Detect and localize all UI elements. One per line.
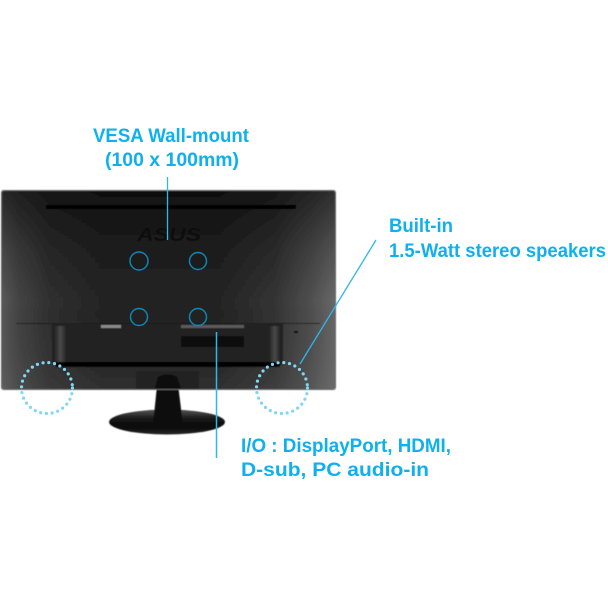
- monitor back panel: [2, 191, 335, 389]
- callout line: VESA: [166, 177, 168, 240]
- label: I/O ports: D-sub, PC audio-in: [241, 460, 429, 481]
- stand neck: [155, 374, 181, 389]
- label: VESA wall-mount: [93, 126, 250, 171]
- lower rear housing: [16, 324, 320, 389]
- callout line: speakers: [300, 240, 376, 364]
- label: speakers: Built-in: [389, 216, 453, 237]
- label: speakers: 1.5-Watt stereo speakers: [389, 241, 606, 262]
- label: I/O ports: I/O : DisplayPort, HDMI,: [241, 436, 451, 457]
- ASUS logo: ASUS: [136, 225, 201, 245]
- callout line: I/O: [216, 332, 218, 458]
- vent slot: [46, 205, 296, 209]
- speaker marker left: [22, 362, 72, 414]
- speaker marker right: [256, 362, 308, 414]
- monitor rear view: [2, 190, 336, 434]
- VESA mount hole markers: [130, 252, 206, 326]
- label: VESA wall-mount: (100 x 100mm): [105, 150, 239, 171]
- label: I/O ports: [241, 436, 451, 481]
- panel outline: [2, 190, 336, 390]
- label: speakers: [389, 216, 606, 262]
- monitor stand: [109, 374, 225, 434]
- label: VESA wall-mount: VESA Wall-mount: [93, 126, 250, 147]
